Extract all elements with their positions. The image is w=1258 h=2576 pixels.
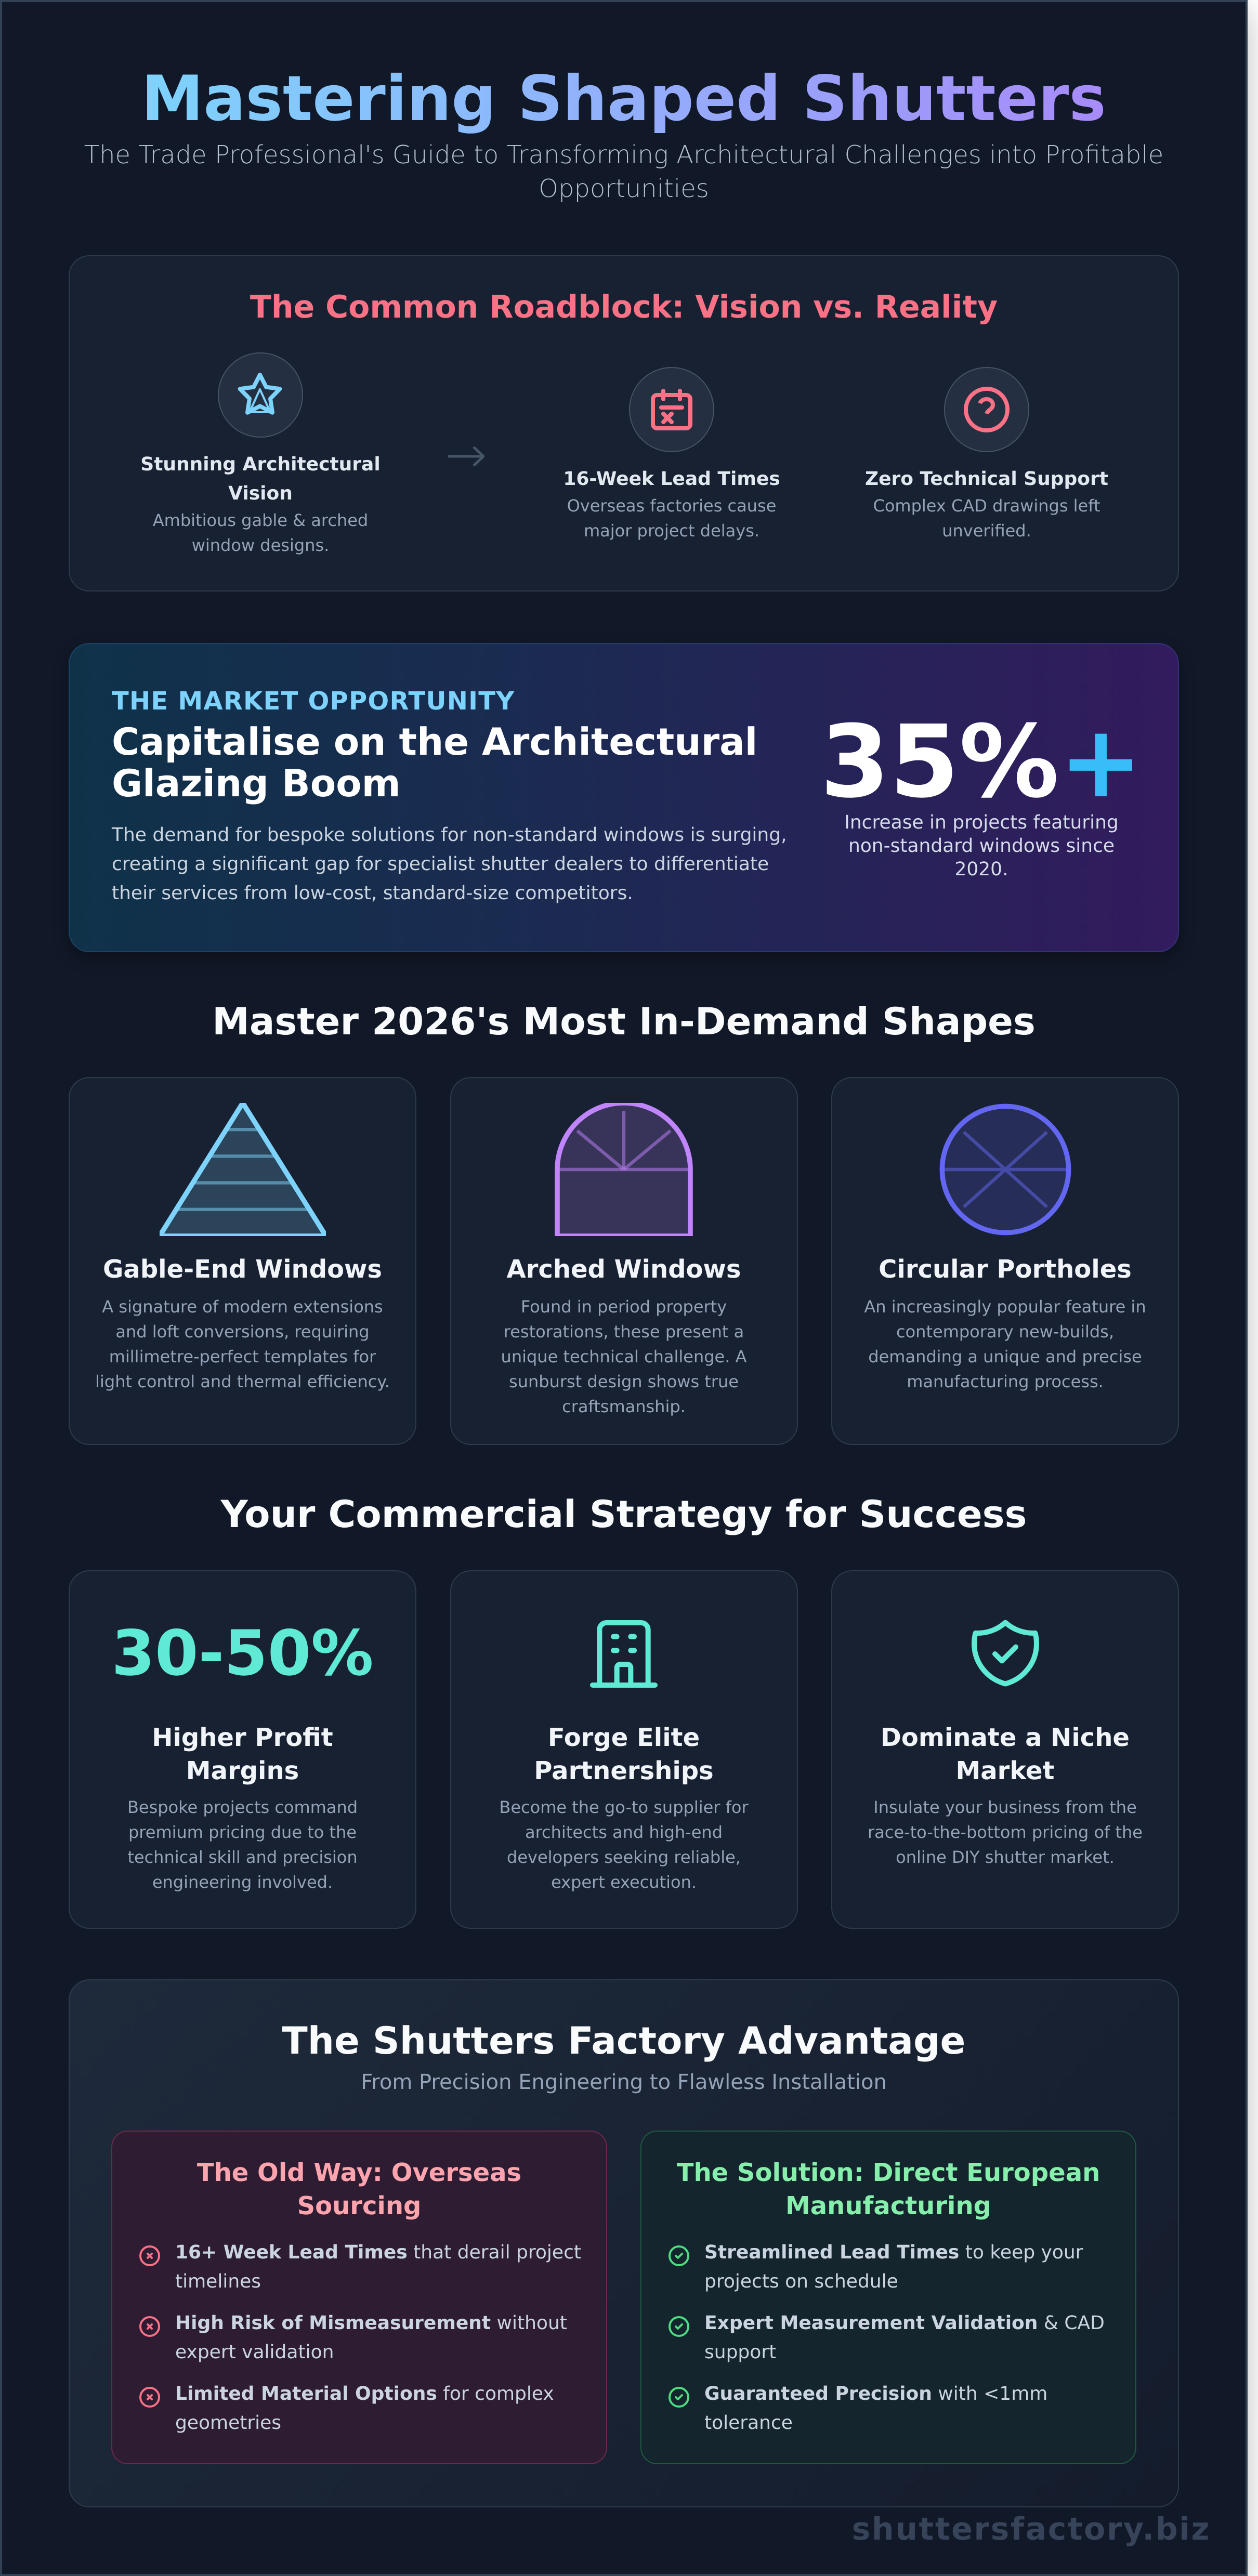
icon: star <box>218 352 303 438</box>
card title <box>450 1721 797 1788</box>
list item: tolerance <box>704 2412 793 2434</box>
old way title: The Old Way: Overseas <box>197 2158 521 2187</box>
step description: window designs. <box>192 535 329 555</box>
stat number: 35%+ <box>820 704 1143 820</box>
panel: shutters factory advantage <box>69 1979 1179 2507</box>
body text: creating a significant gap for specialist shutter dealers to differentiate <box>112 853 769 875</box>
list item: timelines <box>175 2271 261 2292</box>
list item <box>137 2309 584 2367</box>
step description: Ambitious gable & arched <box>153 510 368 530</box>
list item: Expert Measurement Validation & CAD <box>704 2312 1105 2334</box>
card title: Gable-End Windows <box>103 1255 382 1284</box>
card text <box>450 1795 797 1895</box>
card text: light control and thermal efficiency. <box>95 1372 390 1391</box>
card text: and loft conversions, requiring <box>115 1322 370 1342</box>
step title: 16-Week Lead Times <box>563 468 780 490</box>
body text: their services from low-cost, standard-size competitors. <box>112 883 633 904</box>
card text: contemporary new-builds, <box>896 1322 1114 1342</box>
card title <box>831 1721 1179 1788</box>
icon: calendar x <box>629 367 714 452</box>
card text <box>69 1795 416 1895</box>
card text: Insulate your business from the <box>873 1797 1137 1817</box>
body text: The demand for bespoke solutions for non-standard windows is surging, <box>112 824 787 846</box>
list item: High Risk of Mismeasurement without <box>175 2312 567 2334</box>
list item <box>137 2238 584 2296</box>
shape: circle <box>940 1104 1071 1235</box>
heading: roadblock: The Common Roadblock: Vision vs. Reality <box>250 289 998 325</box>
card title: Partnerships <box>534 1756 714 1785</box>
card text <box>501 1297 746 1416</box>
card text <box>864 1297 1146 1391</box>
subtitle: Opportunities <box>539 174 709 203</box>
stat: 30-50%: 30-50% <box>111 1618 374 1690</box>
step title: Zero Technical Support <box>865 468 1108 490</box>
subtitle <box>84 140 1163 203</box>
icon: question <box>944 367 1029 452</box>
panel: solution <box>640 2131 1136 2464</box>
card text: craftsmanship. <box>562 1397 686 1416</box>
panel: partnerships <box>450 1570 797 1929</box>
card title <box>152 1723 333 1785</box>
card text: Bespoke projects command <box>127 1797 358 1817</box>
list item <box>666 2238 1113 2296</box>
list item: geometries <box>175 2412 281 2434</box>
step description <box>567 496 776 541</box>
card text: engineering involved. <box>152 1872 333 1892</box>
panel: common roadblock <box>69 255 1179 592</box>
stat caption: Increase in projects featuring <box>844 812 1119 833</box>
icon: building <box>582 1612 665 1696</box>
list item: Streamlined Lead Times to keep your <box>704 2242 1083 2263</box>
card text <box>831 1795 1179 1870</box>
card text: An increasingly popular feature in <box>864 1297 1146 1317</box>
heading: shapes: Master 2026's Most In-Demand Shapes <box>212 1000 1036 1043</box>
card title: Circular Portholes <box>879 1255 1132 1284</box>
panel: gable-end windows <box>69 1077 416 1445</box>
stat: 35 percent <box>820 704 1143 880</box>
body text <box>111 824 787 904</box>
stat caption <box>844 812 1119 880</box>
panel: circular portholes <box>831 1077 1179 1445</box>
card text <box>95 1297 390 1391</box>
subheading: From Precision Engineering to Flawless Installation <box>361 2070 887 2094</box>
card text: expert execution. <box>551 1872 697 1892</box>
card title: Market <box>956 1756 1054 1785</box>
card title: Margins <box>186 1756 299 1785</box>
step description <box>873 496 1100 541</box>
headline: Capitalise on the Architectural <box>112 720 757 764</box>
step description <box>153 510 368 555</box>
step title <box>140 454 381 504</box>
panel: arched windows <box>450 1077 797 1445</box>
list item: Guaranteed Precision with <1mm <box>704 2383 1047 2404</box>
step: architectural vision <box>140 352 381 555</box>
stat caption: non-standard windows since <box>848 835 1115 857</box>
card text: A signature of modern extensions <box>102 1297 383 1317</box>
list item: expert validation <box>175 2342 334 2363</box>
list item: 16+ Week Lead Times that derail project <box>175 2242 581 2263</box>
card text: technical skill and precision <box>127 1847 358 1867</box>
subtitle: The Trade Professional's Guide to Transforming Architectural Challenges into Profitable <box>84 140 1163 169</box>
card text: online DIY shutter market. <box>896 1847 1115 1867</box>
shape: arch <box>555 1103 693 1236</box>
solution title: The Solution: Direct European <box>677 2158 1100 2187</box>
stat caption: 2020. <box>954 859 1008 880</box>
card text: premium pricing due to the <box>128 1822 357 1842</box>
card title: Higher Profit <box>152 1723 333 1752</box>
solution title <box>640 2156 1136 2223</box>
step: technical support <box>865 367 1108 541</box>
watermark: shuttersfactory.biz <box>852 2511 1211 2547</box>
card text: demanding a unique and precise <box>868 1347 1142 1366</box>
card title: Arched Windows <box>507 1255 741 1284</box>
list item <box>137 2380 584 2438</box>
card text: millimetre-perfect templates for <box>109 1347 376 1366</box>
card title: Dominate a Niche <box>881 1723 1130 1752</box>
arrow <box>448 446 484 466</box>
list item <box>666 2309 1113 2367</box>
solution title: Manufacturing <box>785 2191 991 2220</box>
heading: strategy: Your Commercial Strategy for Success <box>221 1492 1027 1536</box>
old way title <box>111 2156 607 2223</box>
headline: Glazing Boom <box>112 761 401 805</box>
card text: architects and high-end <box>525 1822 723 1842</box>
eyebrow: THE MARKET OPPORTUNITY <box>112 687 515 716</box>
card text: unique technical challenge. A <box>501 1347 746 1366</box>
list item <box>666 2380 1113 2438</box>
old way title: Sourcing <box>297 2191 421 2220</box>
step description: major project delays. <box>584 521 759 541</box>
icon: shield check <box>964 1612 1047 1696</box>
step title: Stunning Architectural <box>140 454 381 475</box>
step title: Vision <box>228 483 293 504</box>
panel: profit margins <box>69 1570 416 1929</box>
card text: Found in period property <box>521 1297 727 1317</box>
card text: restorations, these present a <box>504 1322 744 1342</box>
shape: gable <box>160 1103 326 1236</box>
headline <box>112 720 757 805</box>
card text: developers seeking reliable, <box>507 1847 741 1867</box>
list item: Limited Material Options for complex <box>175 2383 554 2404</box>
card text: Become the go-to supplier for <box>499 1797 749 1817</box>
panel: niche market <box>831 1570 1179 1929</box>
card text: manufacturing process. <box>907 1372 1104 1391</box>
list item: support <box>704 2342 776 2363</box>
step description: Overseas factories cause <box>567 496 776 516</box>
list item: projects on schedule <box>704 2271 898 2292</box>
card text: sunburst design shows true <box>509 1372 739 1391</box>
heading: advantage: The Shutters Factory Advantage <box>282 2019 965 2062</box>
card title: Forge Elite <box>548 1723 700 1752</box>
step description: unverified. <box>942 521 1031 541</box>
card text: race-to-the-bottom pricing of the <box>868 1822 1143 1842</box>
title: Mastering Shaped Shutters <box>141 63 1106 135</box>
step description: Complex CAD drawings left <box>873 496 1100 516</box>
step: lead times <box>563 367 780 541</box>
panel: old way <box>111 2131 607 2464</box>
panel: market opportunity <box>69 643 1179 952</box>
